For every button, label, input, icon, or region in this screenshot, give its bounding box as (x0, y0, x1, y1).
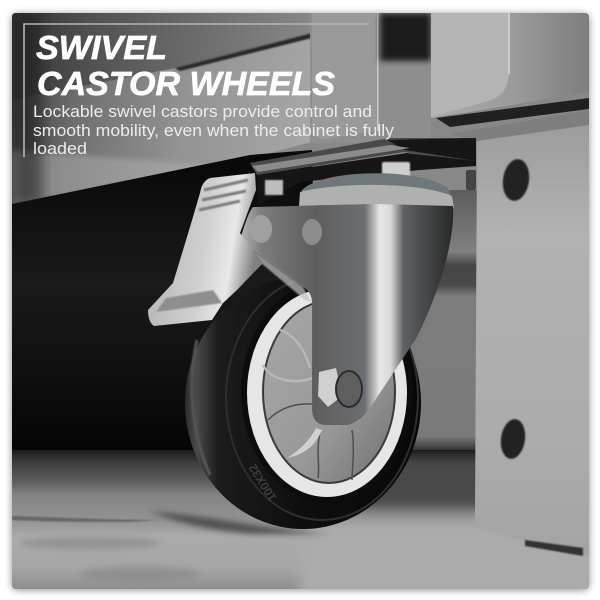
swivel fork bracket (240, 204, 453, 425)
floor (12, 450, 600, 600)
brake lever (148, 173, 263, 326)
description text: smooth mobility, even when the cabinet is fully (33, 122, 395, 140)
wheel (185, 276, 421, 529)
background wall behind the wheel (410, 190, 477, 450)
title: SWIVEL (36, 29, 167, 66)
axle nut (318, 368, 338, 407)
frame accent lines (24, 24, 369, 157)
nut: right (382, 162, 410, 178)
white rim ring (247, 289, 407, 497)
title (36, 29, 335, 102)
side leg panel (475, 125, 589, 556)
drawer front upper right (431, 13, 589, 118)
cabinet centre column (310, 13, 431, 143)
hub spokes (263, 330, 312, 381)
screw: lower (498, 418, 528, 460)
size marking: 100X32 (246, 461, 280, 504)
swivel bearing ring (299, 173, 454, 208)
rivet right (302, 219, 322, 245)
mounting plate (250, 138, 476, 198)
grey hub (263, 301, 395, 483)
cabinet rail and ledge (436, 98, 589, 142)
nut: left (265, 180, 283, 195)
dark recess under the cabinet (12, 150, 320, 465)
cabinet underside upper panel (12, 13, 320, 206)
axle bolt head (336, 371, 362, 407)
rivet left (250, 215, 272, 243)
tyre (185, 277, 421, 529)
description text (33, 103, 395, 158)
description text: loaded (33, 140, 87, 158)
description text: Lockable swivel castors provide control and (33, 103, 372, 121)
screw: upper (502, 158, 530, 202)
title: CASTOR WHEELS (37, 65, 335, 102)
